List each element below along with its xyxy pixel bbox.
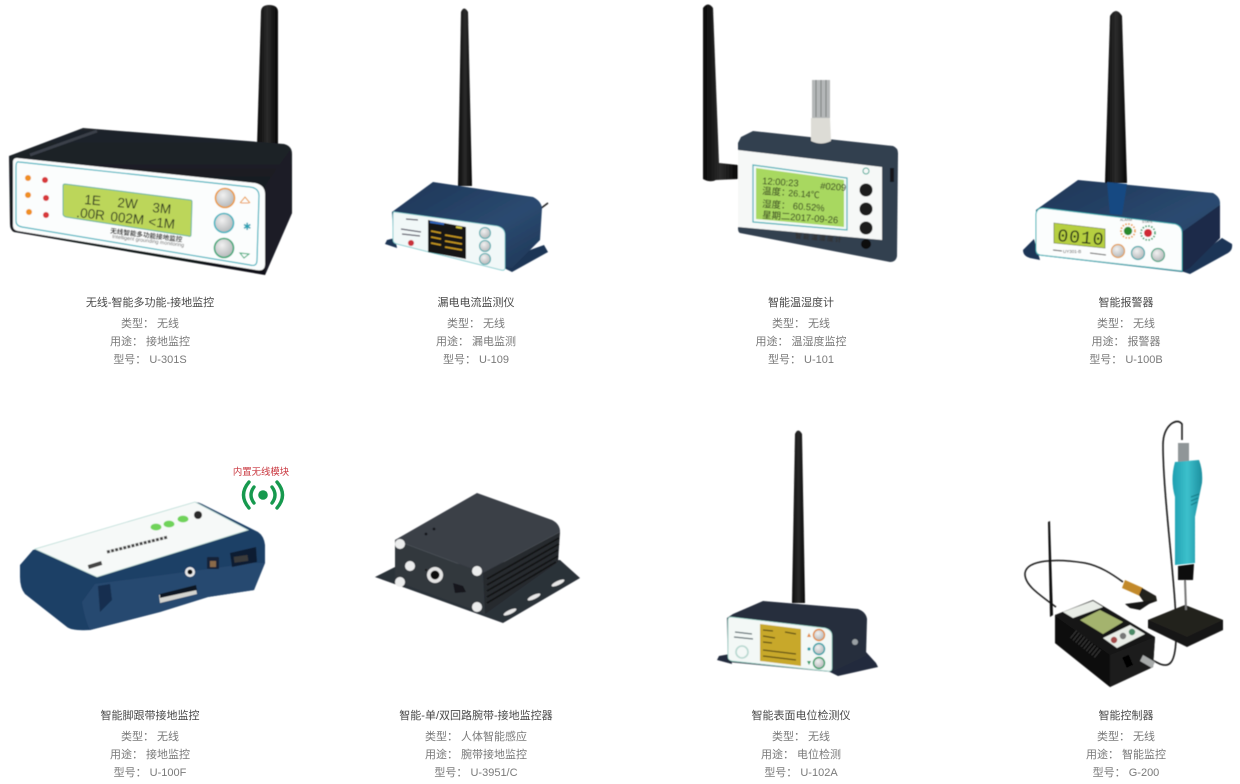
title: 智能-单/双回路腕带-接地监控器 xyxy=(399,708,553,722)
device: U-100F xyxy=(20,502,265,630)
mounting flanges xyxy=(1023,238,1232,274)
specs xyxy=(425,729,527,779)
specs: 类型： 无线 xyxy=(1097,316,1155,330)
device: U-102A xyxy=(717,430,878,676)
screwdriver xyxy=(1178,443,1189,462)
antenna xyxy=(1048,521,1053,617)
screws xyxy=(395,539,482,612)
LCD xyxy=(753,165,847,230)
LCD display: .00R xyxy=(76,205,106,223)
model label xyxy=(1053,250,1106,255)
controller body xyxy=(1055,600,1155,687)
specs: 型号： U-301S xyxy=(113,352,187,366)
white top label xyxy=(35,502,248,577)
work base xyxy=(1148,605,1223,647)
panel: product 2 leakage current monitor xyxy=(385,8,548,366)
wireless module note: 内置无线模块 xyxy=(233,466,290,477)
specs xyxy=(436,316,516,366)
panel: product 6 wrist strap grounding monitor xyxy=(375,493,580,779)
ports xyxy=(185,567,195,577)
device: U-100B xyxy=(1023,11,1232,274)
finned side xyxy=(483,532,560,614)
specs: 类型： 无线 xyxy=(121,316,179,330)
front panel xyxy=(13,158,265,270)
panel: product 1 wireless multifunction grounding monitor xyxy=(9,5,292,366)
display xyxy=(428,220,466,259)
buttons xyxy=(480,228,490,238)
panel: product 3 smart thermo-hygrometer xyxy=(703,4,898,366)
antenna xyxy=(458,8,472,186)
buttons xyxy=(814,630,824,640)
antenna xyxy=(257,5,278,147)
specs: 用途： 电位检测 xyxy=(761,747,841,761)
front panel xyxy=(1036,208,1182,271)
housing xyxy=(9,128,292,275)
logo text xyxy=(401,219,421,236)
specs: 用途： 温湿度监控 xyxy=(755,334,847,348)
title: 智能报警器 xyxy=(1098,295,1154,309)
specs: 型号： G-200 xyxy=(1093,765,1159,779)
panel: product 8 smart controller xyxy=(1025,422,1223,779)
panel: product 4 smart alarm xyxy=(1023,11,1232,366)
title: 智能控制器 xyxy=(1098,708,1154,722)
indicator lights xyxy=(1120,218,1155,240)
specs xyxy=(761,729,841,779)
sensor probe xyxy=(812,80,830,118)
LCD: 温度： xyxy=(762,185,791,198)
device: U-301S: Intelligent grounding monitoring xyxy=(112,234,184,249)
housing xyxy=(392,182,542,268)
controller panels xyxy=(1063,601,1103,618)
specs: 类型： 人体智能感应 xyxy=(425,729,527,743)
mounting flanges xyxy=(717,652,878,676)
specs: 型号： U-100B xyxy=(1089,352,1163,366)
specs xyxy=(755,316,847,366)
switch xyxy=(453,583,466,593)
LCD: 26.14℃ xyxy=(788,188,820,200)
buttons: ✱ xyxy=(243,222,251,233)
device: U-3951/C xyxy=(375,493,580,623)
panel: product 7 surface potential detector xyxy=(717,430,878,779)
card slot xyxy=(159,589,197,603)
red LED xyxy=(408,240,414,246)
title: 漏电电流监测仪 xyxy=(438,295,514,309)
specs: 型号： U-109 xyxy=(443,352,509,366)
housing xyxy=(727,601,867,672)
indicator lights: STATE xyxy=(1142,220,1153,224)
specs xyxy=(1089,316,1163,366)
device: U-109 xyxy=(385,8,548,272)
housing xyxy=(20,502,265,630)
LCD display: <1M xyxy=(148,214,176,232)
specs: 型号： U-101 xyxy=(768,352,834,366)
panel caption: 无线智能多功能接地监控 xyxy=(110,226,183,244)
LCD display: 2W xyxy=(117,195,138,212)
front face xyxy=(395,540,485,614)
caption: 智能温湿度计 xyxy=(795,231,843,244)
LCD display: 1E xyxy=(84,192,101,208)
sensor cable xyxy=(1025,560,1123,607)
specs: 类型： 无线 xyxy=(1097,729,1155,743)
LCD display: 002M xyxy=(110,209,145,228)
device: U-101 xyxy=(703,4,898,262)
LCD: 湿度： 60.52% xyxy=(762,198,825,213)
sensor xyxy=(1122,580,1143,596)
screen xyxy=(760,624,801,666)
specs: 用途： 报警器 xyxy=(1091,334,1161,348)
LCD: 星期二2017-09-26 xyxy=(762,209,839,225)
title: 智能脚跟带接地监控 xyxy=(100,708,200,722)
antenna xyxy=(703,4,738,181)
specs xyxy=(110,729,190,779)
top face xyxy=(395,493,560,573)
device: G-200 xyxy=(1025,422,1223,687)
LCD: #0209 xyxy=(820,180,847,193)
screwdriver cable xyxy=(1146,422,1182,665)
front panel xyxy=(738,150,882,240)
panel: product 5 ankle strap grounding monitor xyxy=(20,466,290,779)
device: U-301S xyxy=(9,5,292,275)
buttons xyxy=(214,188,251,258)
housing xyxy=(738,131,898,262)
connector and switch xyxy=(1140,655,1155,668)
specs: 类型： 无线 xyxy=(447,316,505,330)
specs: 型号： U-102A xyxy=(764,765,838,779)
specs: 类型： 无线 xyxy=(772,729,830,743)
jack xyxy=(427,567,443,583)
specs: 用途： 智能监控 xyxy=(1086,747,1166,761)
LCD display xyxy=(63,184,192,236)
specs: 类型： 无线 xyxy=(772,316,830,330)
buttons xyxy=(1112,244,1124,258)
title: 无线-智能多功能-接地监控 xyxy=(86,295,214,309)
antenna xyxy=(792,430,805,603)
front panel xyxy=(393,212,505,270)
specs: 用途： 接地监控 xyxy=(110,747,190,761)
specs xyxy=(1086,729,1166,779)
buttons xyxy=(863,168,869,174)
title: 智能表面电位检测仪 xyxy=(752,708,850,722)
antenna xyxy=(1105,11,1127,183)
status LEDs xyxy=(25,175,49,218)
specs: 类型： 无线 xyxy=(121,729,179,743)
specs xyxy=(110,316,190,366)
specs: 型号： U-3951/C xyxy=(434,765,518,779)
green LEDs xyxy=(150,524,162,530)
specs: 用途： 漏电监测 xyxy=(436,334,516,348)
specs: 用途： 腕带接地监控 xyxy=(425,747,527,761)
mounting flange xyxy=(375,560,580,623)
power cord xyxy=(540,203,548,209)
housing xyxy=(1036,180,1220,272)
mounting flanges xyxy=(385,238,548,272)
specs: 型号： U-100F xyxy=(114,765,187,779)
icon: wireless signal xyxy=(244,482,282,508)
indicator lights: ALARM xyxy=(1120,218,1132,222)
label and logo xyxy=(734,632,753,639)
LED display: 0010 xyxy=(1056,227,1105,251)
LCD: 12:00:23 xyxy=(762,175,799,189)
title: 智能温湿度计 xyxy=(768,295,834,309)
front panel xyxy=(728,617,832,671)
specs: 用途： 接地监控 xyxy=(110,334,190,348)
device: U-100B: UY301-B xyxy=(1063,249,1081,254)
LCD display: 3M xyxy=(152,200,172,217)
